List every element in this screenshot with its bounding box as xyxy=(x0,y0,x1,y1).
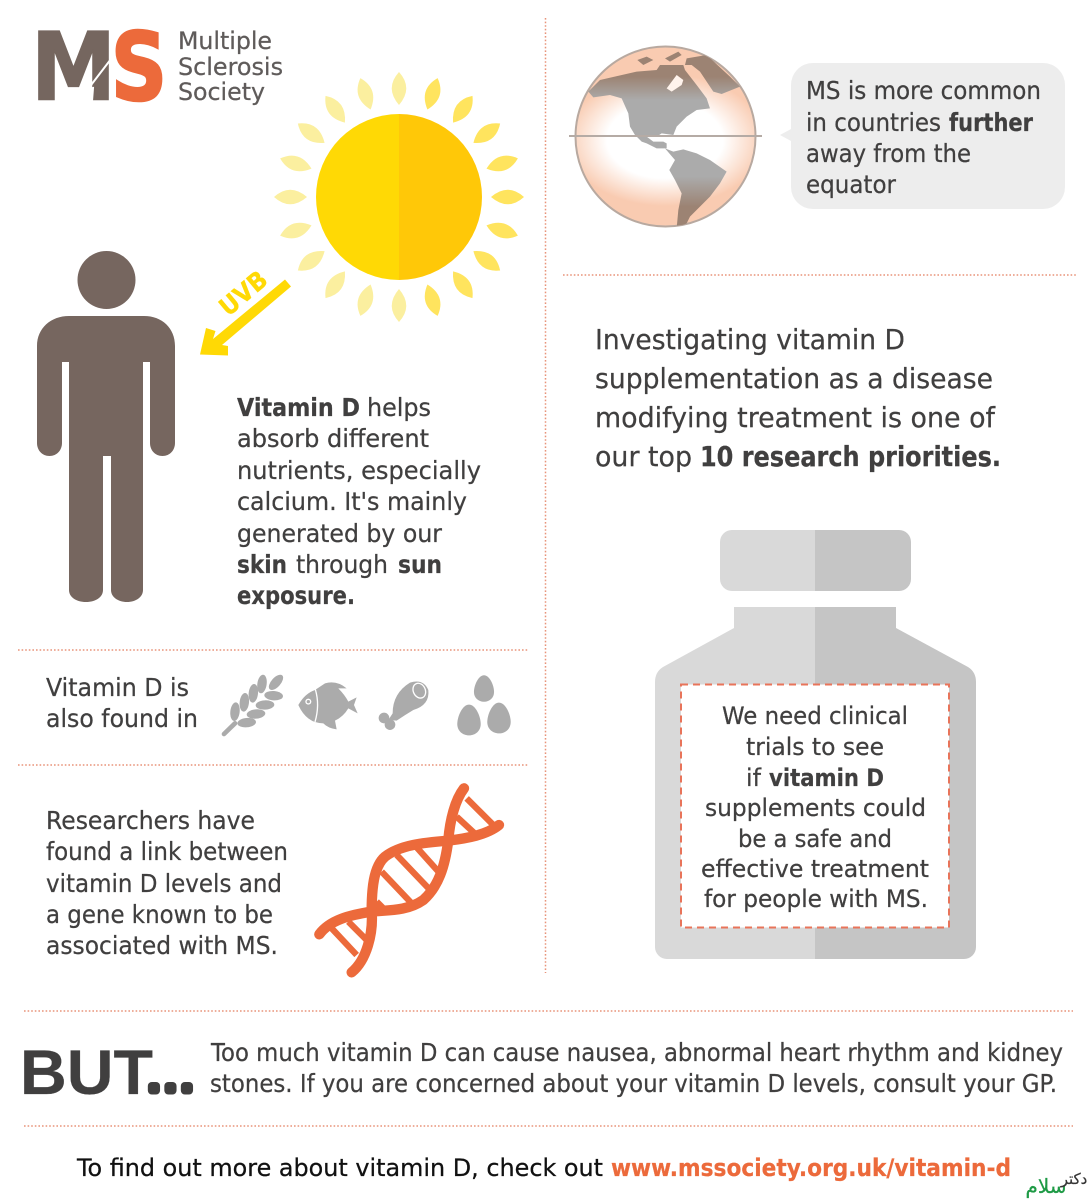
label text: trials to see xyxy=(746,733,884,761)
text: vitamin D explanation: through xyxy=(296,550,388,579)
icon: chicken drumstick xyxy=(379,681,428,730)
callout: further from the equator: away from the xyxy=(806,139,971,168)
label text: vitamin D xyxy=(769,764,884,792)
text: research priorities: modifying treatment is one of xyxy=(595,401,996,434)
logo: MS Society: Society xyxy=(178,78,265,106)
text: vitamin D explanation xyxy=(237,393,481,610)
label text: be a safe and xyxy=(738,825,892,853)
text: vitamin D is also found in xyxy=(46,673,198,733)
label text: if xyxy=(746,764,762,792)
text: vitamin D is also found in: Vitamin D is xyxy=(46,673,189,702)
watermark: دکتر xyxy=(1060,1170,1087,1188)
text: vitamin D explanation: generated by our xyxy=(237,519,443,548)
text: vitamin D explanation: Vitamin D xyxy=(237,393,360,422)
text: vitamin D explanation: exposure. xyxy=(237,581,355,610)
text: vitamin D explanation: helps xyxy=(367,393,431,422)
label text: for people with MS. xyxy=(704,885,928,913)
logo: MS Society: S xyxy=(111,14,167,122)
text: researchers gene link xyxy=(46,806,288,960)
icon: DNA helix xyxy=(319,788,499,972)
bottle cap xyxy=(720,530,911,591)
icon: human figure xyxy=(37,251,175,602)
text: vitamin D explanation: absorb different xyxy=(237,424,429,453)
text: research priorities: Investigating vitamin D xyxy=(595,323,905,356)
footer: find out more link: www.mssociety.org.uk/vitamin-d xyxy=(611,1154,1011,1182)
icon: sun with rays xyxy=(274,72,524,322)
text: vitamin D is also found in: also found in xyxy=(46,704,198,733)
label text: supplements could xyxy=(705,794,926,822)
label text: We need clinical xyxy=(722,702,908,730)
icon: wheat xyxy=(224,672,286,734)
text: vitamin D explanation: skin xyxy=(237,550,287,579)
text: researchers gene link: a gene known to be xyxy=(46,900,273,929)
arrow: UVB rays xyxy=(200,265,291,356)
text: researchers gene link: associated with MS. xyxy=(46,931,278,960)
text: research priorities: our top xyxy=(595,440,692,473)
label text: effective treatment xyxy=(701,855,929,883)
callout: further from the equator xyxy=(780,63,1065,209)
callout: further from the equator: further xyxy=(949,108,1034,137)
text: vitamin D explanation: calcium. It's mainly xyxy=(237,487,467,516)
text: warning about too much vitamin D: stones. If you are concerned about your vitamin D levels, consult your GP. xyxy=(210,1069,1057,1098)
watermark xyxy=(1025,1170,1087,1198)
icon: fish xyxy=(298,682,358,729)
heading: BUT...: BUT xyxy=(20,1038,153,1108)
text: research priorities xyxy=(595,323,1001,473)
label text xyxy=(701,702,929,913)
logo: MS Society: M xyxy=(31,14,116,122)
arrow: UVB rays: UVB xyxy=(213,265,273,322)
logo: MS Society: Sclerosis xyxy=(178,53,283,81)
text: vitamin D explanation: nutrients, especially xyxy=(237,456,481,485)
text: researchers gene link: found a link between xyxy=(46,837,288,866)
logo: MS Society: Multiple xyxy=(178,27,272,55)
text: researchers gene link: vitamin D levels and xyxy=(46,869,282,898)
icon: supplement bottle xyxy=(655,530,976,959)
text: research priorities: 10 research priorities. xyxy=(700,440,1001,473)
footer: find out more link: To find out more about vitamin D, check out xyxy=(76,1154,603,1182)
icon: globe with equator xyxy=(569,46,762,228)
text: vitamin D explanation: sun xyxy=(398,550,442,579)
callout: further from the equator: MS is more common xyxy=(806,76,1041,105)
bottle body xyxy=(655,607,976,959)
text: warning about too much vitamin D xyxy=(210,1038,1063,1098)
callout: further from the equator: in countries xyxy=(806,108,941,137)
icon: eggs xyxy=(457,675,511,735)
callout: further from the equator: equator xyxy=(806,170,897,199)
dashed label xyxy=(681,684,949,928)
heading: BUT...: ... xyxy=(149,1068,199,1096)
text: research priorities: supplementation as a disease xyxy=(595,362,993,395)
footer: find out more link xyxy=(76,1154,1011,1182)
logo: MS Society xyxy=(31,14,283,122)
text: researchers gene link: Researchers have xyxy=(46,806,255,835)
watermark: سلام xyxy=(1025,1174,1067,1198)
